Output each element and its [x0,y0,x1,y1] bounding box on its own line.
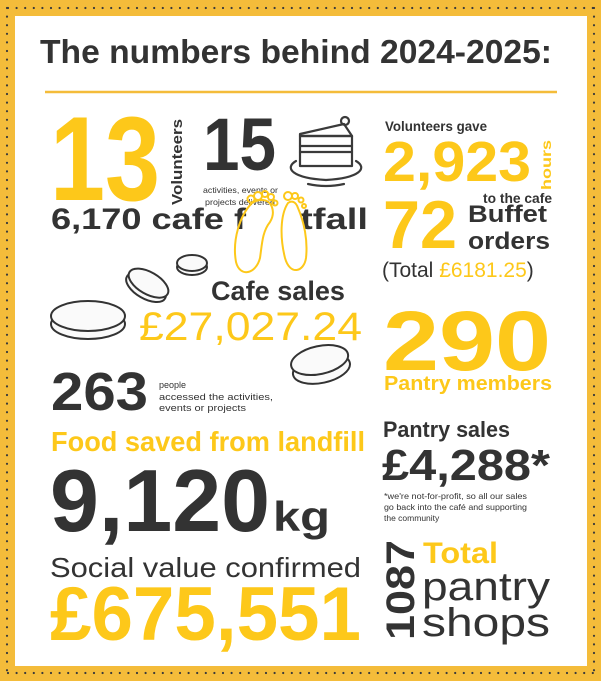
icon: coins [51,255,353,389]
stat: pantry shops: pantry [422,565,550,609]
stat: social value: Social value confirmed [50,552,361,583]
stat: social value: £675,551 [50,572,361,657]
stat: buffet orders: 72 [383,187,457,263]
stat: 263 people: events or projects [159,403,247,413]
stat: buffet orders [382,187,550,282]
stat: cafe footfall [51,191,368,272]
stat: buffet orders: orders [468,228,550,255]
stat: volunteer hours: hours [538,140,554,190]
stat: pantry sales: £4,288* [382,441,551,490]
stat: 263 people: accessed the activities, [159,392,273,402]
stat: food saved [50,426,365,550]
stat: pantry shops: 1087 [379,540,423,640]
stat: buffet orders: (Total £6181.25) [382,259,534,282]
stat: 263 people: 263 [51,362,148,422]
stat: 15 activities: 15 [203,103,276,186]
stat: cafe sales: £27,027.24 [139,305,362,349]
stat: cafe sales [139,276,362,349]
stat: 15 activities: activities, events or [203,185,278,195]
icon: feet [235,191,307,272]
stat: pantry shops [379,537,550,645]
stat: 15 activities: projects delivered [205,197,275,207]
stat: 290 pantry members: Pantry members [384,373,552,395]
stat: buffet orders: Buffet [468,201,547,228]
stat: 263 people: people [159,380,186,390]
stat: 13 volunteers: 13 [50,92,160,226]
stat: cafe sales: Cafe sales [211,276,345,306]
stat: pantry sales: Pantry sales [383,417,510,442]
stat: volunteer hours: to the cafe [483,191,553,206]
stat: food saved: 9,120 [50,451,270,550]
stat: 13 volunteers: Volunteers [169,119,186,205]
stat: pantry sales: the community [384,513,440,523]
stat: pantry sales: *we're not-for-profit, so all our sales [384,491,527,501]
stat: 290 pantry members: 290 [383,294,551,388]
stat: cafe footfall: tfall [300,203,368,236]
stat: pantry sales [382,417,551,523]
stat: volunteer hours [383,119,554,206]
stat: volunteer hours: 2,923 [383,130,531,194]
stat: food saved: kg [273,493,330,540]
stat: 263 people [51,362,273,422]
stat: pantry shops: Total [423,537,498,570]
stat: pantry sales: go back into the café and supporting [384,502,527,512]
stat: volunteer hours: Volunteers gave [385,119,487,134]
icon: cake [291,117,361,186]
title: The numbers behind 2024-2025: [40,33,552,70]
stat: cafe footfall: 6,170 cafe f [51,203,247,236]
stat: food saved: Food saved from landfill [51,426,365,457]
stat: pantry shops: shops [422,601,550,645]
